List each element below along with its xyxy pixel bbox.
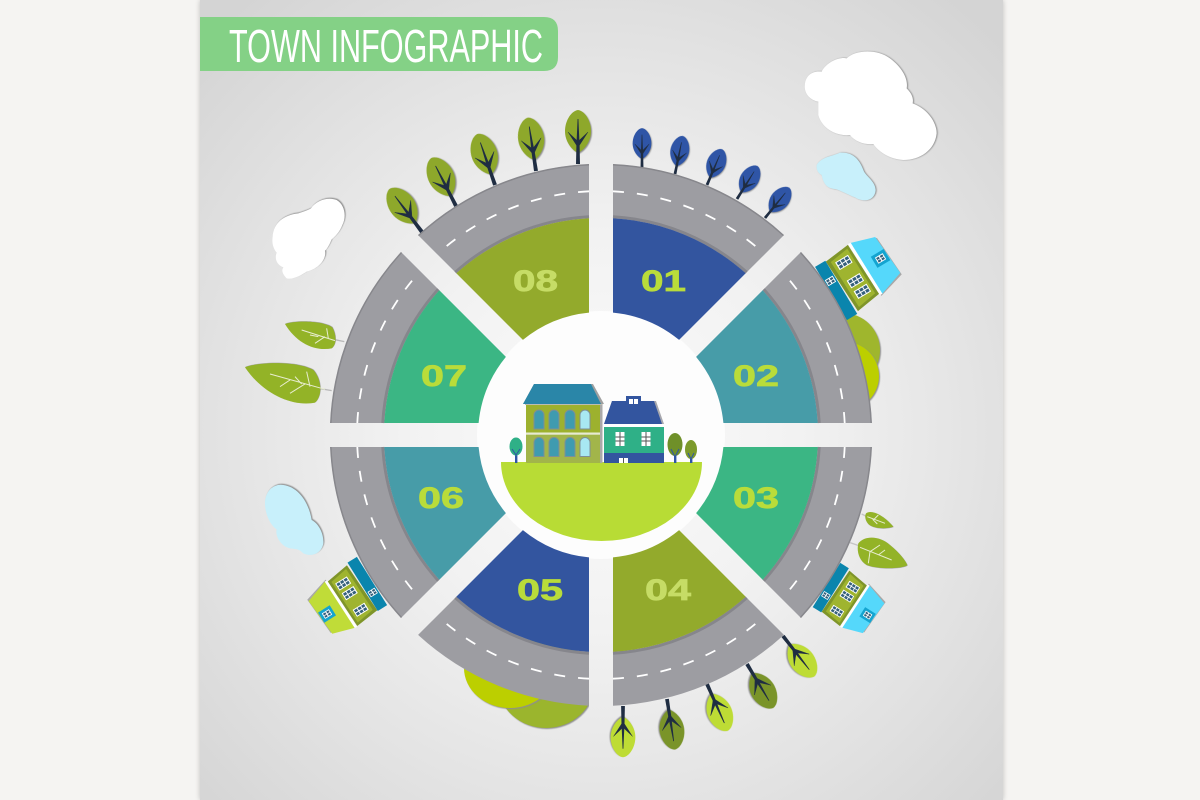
- number 02: 02: [733, 360, 779, 393]
- leaves: right side pair: [850, 512, 907, 568]
- segment 07: [330, 252, 506, 423]
- segment 03: [696, 447, 872, 618]
- panel: page background: [200, 0, 1003, 800]
- segment 02: [696, 252, 872, 423]
- trees: blue, top right: [633, 128, 797, 224]
- cloud: large white top right: [805, 51, 937, 160]
- small trees right: [668, 433, 697, 463]
- cloud: white left: [272, 199, 345, 279]
- bushes behind road, right side: [806, 313, 880, 410]
- title text: TOWN INFOGRAPHIC: [229, 20, 543, 72]
- bushes behind road, bottom: [464, 640, 589, 730]
- segment 01: [613, 164, 784, 340]
- house: bottom right on road 03: [812, 563, 891, 640]
- small tree left: [510, 438, 522, 463]
- number 01: 01: [641, 265, 686, 298]
- number 06: 06: [418, 482, 464, 515]
- number 03: 03: [733, 482, 779, 515]
- number 04: 04: [645, 574, 691, 607]
- house: bottom left on road 06: [302, 557, 388, 642]
- large building: [523, 384, 604, 463]
- trees: olive, top left: [379, 110, 591, 240]
- ground hill: [501, 462, 702, 541]
- trees: lime and olive, bottom right: [611, 628, 824, 757]
- central town scene: [501, 384, 702, 541]
- number 05: 05: [517, 574, 563, 607]
- segment 08: [418, 164, 589, 340]
- title banner: [200, 17, 558, 72]
- number 08: 08: [513, 265, 558, 298]
- cloud: small blue top right: [817, 153, 876, 200]
- leaves: left side pair: [245, 322, 344, 403]
- segment 04: [613, 530, 784, 706]
- central white circle: [477, 311, 725, 559]
- house: top right on road 02: [814, 228, 907, 320]
- segment 06: [330, 447, 506, 618]
- number 07: 07: [421, 360, 467, 393]
- cloud: blue lower left: [265, 485, 323, 555]
- segment 05: [418, 530, 589, 706]
- small building: [604, 396, 664, 463]
